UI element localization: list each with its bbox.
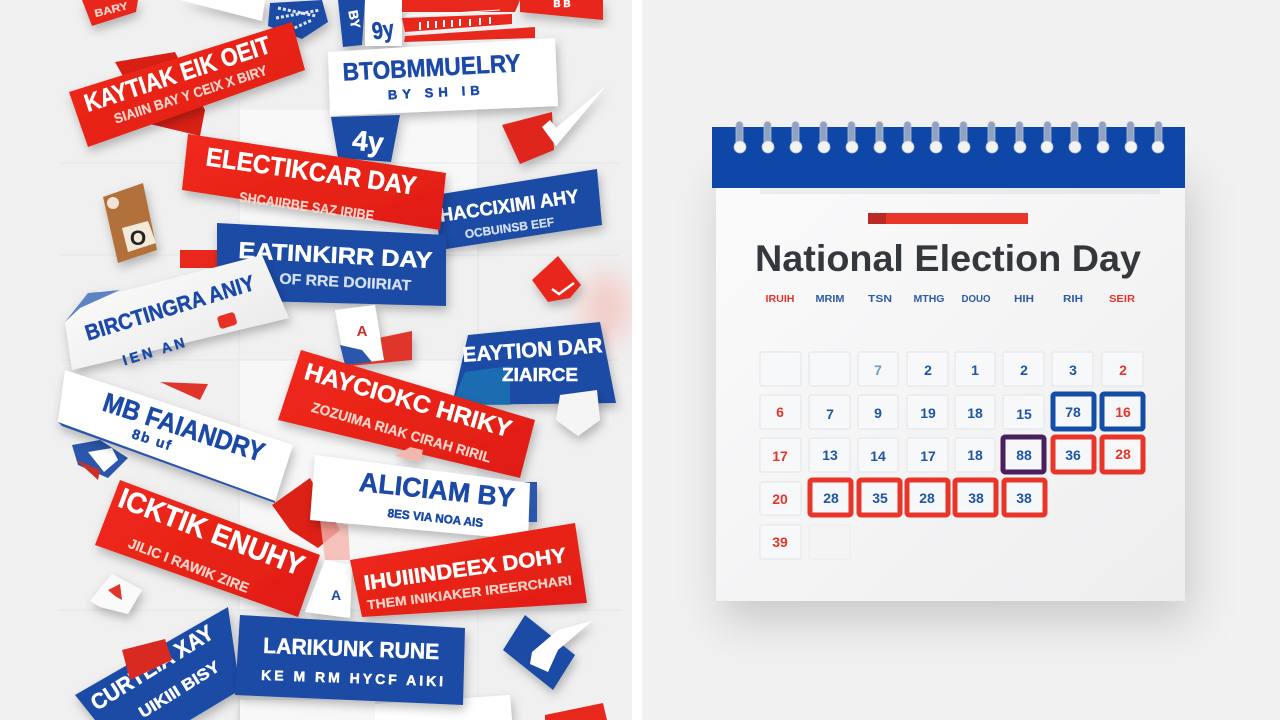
scrap: red backing with pink fade [272,478,350,560]
calendar header [712,127,1185,194]
banner: blue center: OF RRE DOIIRIAT [279,271,412,294]
banner: blue right lower [452,322,616,405]
red accent bar [868,213,1028,224]
banner: white torn [65,255,289,370]
banner: blue bottom left: CURTEIA XAY [86,620,218,715]
icon: blue ballot with check [503,615,592,690]
banner: red right lower: IHUIIINDEEX DOHY [362,544,568,595]
scrap: top blue stripe: 9y [370,16,396,45]
banner: blue center [217,223,446,306]
banner: white left: MB FAIANDRY [99,387,268,468]
row 2: 19 [920,405,936,421]
banner: white torn: BIRCTINGRA ANIY [82,270,258,346]
weekday labels: DOUO [962,293,990,305]
weekday labels: TSN [868,293,892,305]
weekday labels: RIH [1063,293,1083,305]
scrap: blue torn ballot: 4y [351,125,386,159]
red backing shape [115,52,205,136]
banner: red right middle: HAYCIOKC HRIKY [301,358,515,443]
banner: red right lower [350,523,587,617]
weekday labels: MTHG [914,293,944,305]
weekday labels: SEIR [1109,293,1135,305]
row 3 [760,437,1143,472]
row 2: 6 [776,404,784,420]
row 4: 38 [968,490,984,506]
weekday labels [766,293,1135,305]
banner: white center: ALICIAM BY [358,467,516,513]
banner: white left: 8b uf [130,425,173,453]
row 3: 18 [967,447,983,463]
left panel background [0,0,632,720]
banner: blue bottom center: KE M RM HYCF AIKI [261,667,443,689]
row 1: 3 [1069,362,1077,378]
scrap: flag card [335,305,412,366]
row 1: 2 [1119,362,1127,378]
scrap: blue torn ballot [331,115,400,162]
banner: red election day: SHCAIIRBE SAZ IRIBE [238,189,375,223]
icon: red box [532,256,581,302]
row 2: 9 [874,405,882,421]
divider strip [632,0,642,720]
row 2: 78 [1065,404,1081,420]
banner: blue right lower: EAYTION DAR [462,334,603,367]
row 4: 28 [823,490,839,506]
banner: red right middle: ZOZUIMA RIAK CIRAH RIRIL [310,399,493,466]
banner: blue center: EATINKIRR DAY [238,237,433,273]
row 1: 7 [874,362,882,378]
banner: white left [58,370,293,503]
banner: white center: 8ES VIA NOA AIS [387,506,484,530]
row 4 [760,480,1045,515]
icon: white envelope with red star [90,574,142,614]
row 4: 20 [772,491,788,507]
icon: brown stamp [103,183,157,263]
scrap: white bottom papers [240,695,512,720]
panel: wall calendar [712,122,1185,601]
scrap: top blue stripe: BY [345,9,363,30]
banner: white top [328,38,558,116]
row 4: 35 [872,490,888,506]
row 3: 36 [1065,447,1081,463]
scrap: red and blue under white banner [72,382,208,480]
scrap: white flag card: A [331,587,341,603]
scrap: top red tag [82,0,138,26]
icon: brown stamp: O [130,227,146,250]
row 3: 17 [772,448,788,464]
banner: red left lower [95,480,320,617]
banner: white torn: IEN AN [121,334,186,368]
scrap: top blue stripe [338,0,402,47]
banner: red election day [182,134,446,230]
banner: blue right lower: ZIAIRCE [502,365,578,385]
scrap: small red strip [180,250,218,268]
icon: white envelope right [556,390,600,436]
right panel background [642,0,1280,720]
banner: red left lower: ICKTIK ENUHY [114,483,308,583]
row 3: 17 [920,448,936,464]
banner: blue right [435,169,602,250]
icon: red ballot with check [502,86,606,164]
row 3: 14 [870,448,886,464]
row 2: 18 [967,405,983,421]
banner: white top: BY SH IB [387,83,480,102]
banner: red left lower: JILIC I RAWIK ZIRE [126,535,251,596]
scrap: bottom right red [545,703,607,720]
row 2 [760,394,1143,429]
scrap: top flag stripes [402,0,535,42]
banner: blue bottom center [235,615,465,705]
row 1 [760,352,1143,386]
weekday labels: MRIM [816,293,845,305]
banner: red right lower: THEM INIKIAKER IREERCHARI [366,573,573,613]
banner: red election day: ELECTIKCAR DAY [204,141,418,201]
banner: white center [310,455,537,540]
scrap: top red tag: BARY [93,0,129,20]
panel: scattered election banners [58,0,616,720]
scrap: top right red [520,0,603,20]
weekday labels: HIH [1014,293,1034,305]
scrap: top white paper [180,0,265,21]
spiral rings [734,122,1164,153]
row 3: 88 [1016,447,1032,463]
scrap: red flag [122,639,172,680]
row 4: 38 [1016,490,1032,506]
scrap: flag card: A [357,323,368,340]
row 3: 13 [822,447,838,463]
scrap: top blue ballot [268,0,328,39]
weekday labels: IRUIH [766,293,794,305]
banner: white top: BTOBMMUELRY [342,49,521,87]
row 1: 1 [971,362,979,378]
banner: blue right: HACCIXIMI AHY [438,186,580,227]
row 1: 2 [1020,362,1028,378]
banner: blue bottom center: LARIKUNK RUNE [263,633,440,664]
row 2: 7 [826,406,834,422]
banner: red top left: KAYTIAK EIK OEIT [81,31,274,118]
banner: blue right: OCBUINSB EEF [464,215,555,241]
scrap: white flag card [305,560,352,618]
row 1: 2 [924,362,932,378]
row 5: 39 [772,534,788,550]
row 2: 16 [1115,404,1131,420]
banner: red top left: SIAIIN BAY Y CEIX X BIRY [112,62,270,127]
row 5 [760,525,850,559]
title: National Election Day [755,238,1141,279]
row 2: 15 [1016,406,1032,422]
calendar page [716,160,1185,601]
date grid [760,352,1143,559]
row 4: 28 [919,490,935,506]
row 3: 28 [1115,446,1131,462]
banner: red right middle [278,350,535,478]
